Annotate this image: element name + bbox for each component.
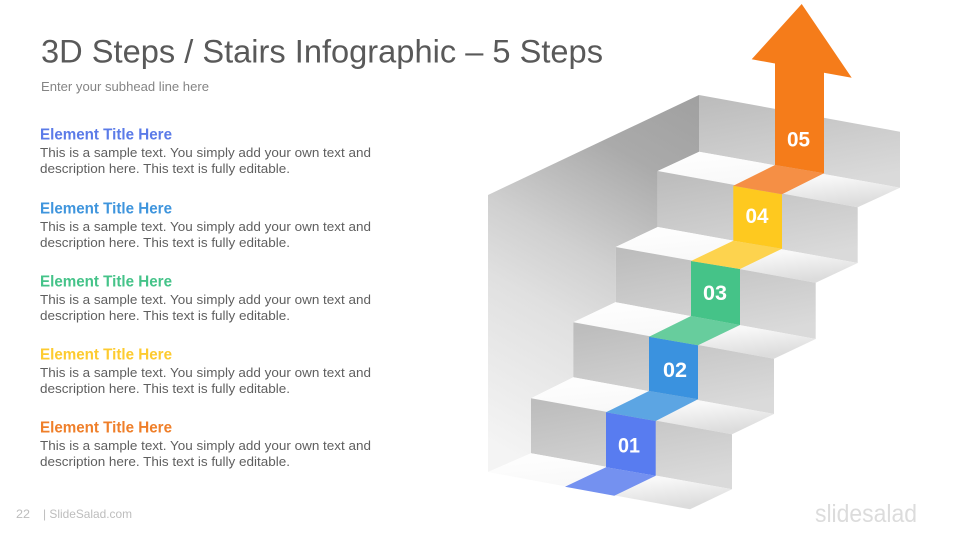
step 02 — [606, 337, 698, 421]
text block: element 4: This is a sample text. You simply add your own text and — [40, 365, 371, 380]
text block: element 4 — [40, 346, 371, 396]
side wall — [488, 95, 699, 472]
floor tread — [488, 453, 732, 509]
text block: element 5 — [40, 420, 371, 469]
step 03 — [649, 261, 740, 345]
tread 4 — [658, 152, 900, 207]
text block: element 3: description here. This text is fully editable. — [40, 308, 290, 323]
step 04 — [691, 186, 782, 269]
staircase graphic — [488, 95, 900, 509]
text block: element 5: This is a sample text. You simply add your own text and — [40, 438, 371, 453]
riser 3 — [616, 247, 816, 339]
step 02: 02 — [663, 359, 687, 382]
subhead: Enter your subhead line here — [41, 79, 209, 94]
text block: element 5: description here. This text is fully editable. — [40, 454, 290, 469]
text block: element 1: Element Title Here — [40, 126, 172, 144]
title: 3D Steps / Stairs Infographic – 5 Steps — [41, 34, 603, 70]
step 03: 03 — [703, 282, 727, 305]
text block: element 1: This is a sample text. You simply add your own text and — [40, 145, 371, 160]
text block: element 2: This is a sample text. You simply add your own text and — [40, 219, 371, 234]
text block: element 3: Element Title Here — [40, 274, 172, 290]
tread 2 — [573, 302, 816, 359]
tread 1 — [531, 377, 774, 434]
text block: element 3: This is a sample text. You simply add your own text and — [40, 292, 371, 307]
text block: element 2: description here. This text is fully editable. — [40, 235, 290, 250]
text block: element 5: Element Title Here — [40, 420, 172, 436]
step 05 arrow: 05 — [787, 129, 810, 152]
step 01: 01 — [618, 434, 640, 458]
text block: element 2 — [40, 200, 371, 250]
step 04: 04 — [746, 205, 769, 228]
text block: element 4: Element Title Here — [40, 346, 172, 364]
text block: element 3 — [40, 274, 371, 323]
footer: 22 — [16, 507, 30, 521]
text block: element 4: description here. This text is fully editable. — [40, 381, 290, 396]
step 05 arrow — [733, 4, 852, 194]
text block: element 2: Element Title Here — [40, 200, 172, 218]
step 01 — [565, 412, 656, 496]
tread 3 — [616, 227, 858, 283]
footer: | SlideSalad.com — [43, 507, 132, 521]
riser 2 — [573, 322, 774, 414]
top riser — [699, 95, 900, 188]
riser 1 — [531, 398, 732, 489]
riser 4 — [658, 171, 858, 263]
text block: element 1: description here. This text is fully editable. — [40, 161, 290, 176]
watermark logo: slidesalad — [815, 500, 917, 528]
text block: element 1 — [40, 126, 371, 176]
